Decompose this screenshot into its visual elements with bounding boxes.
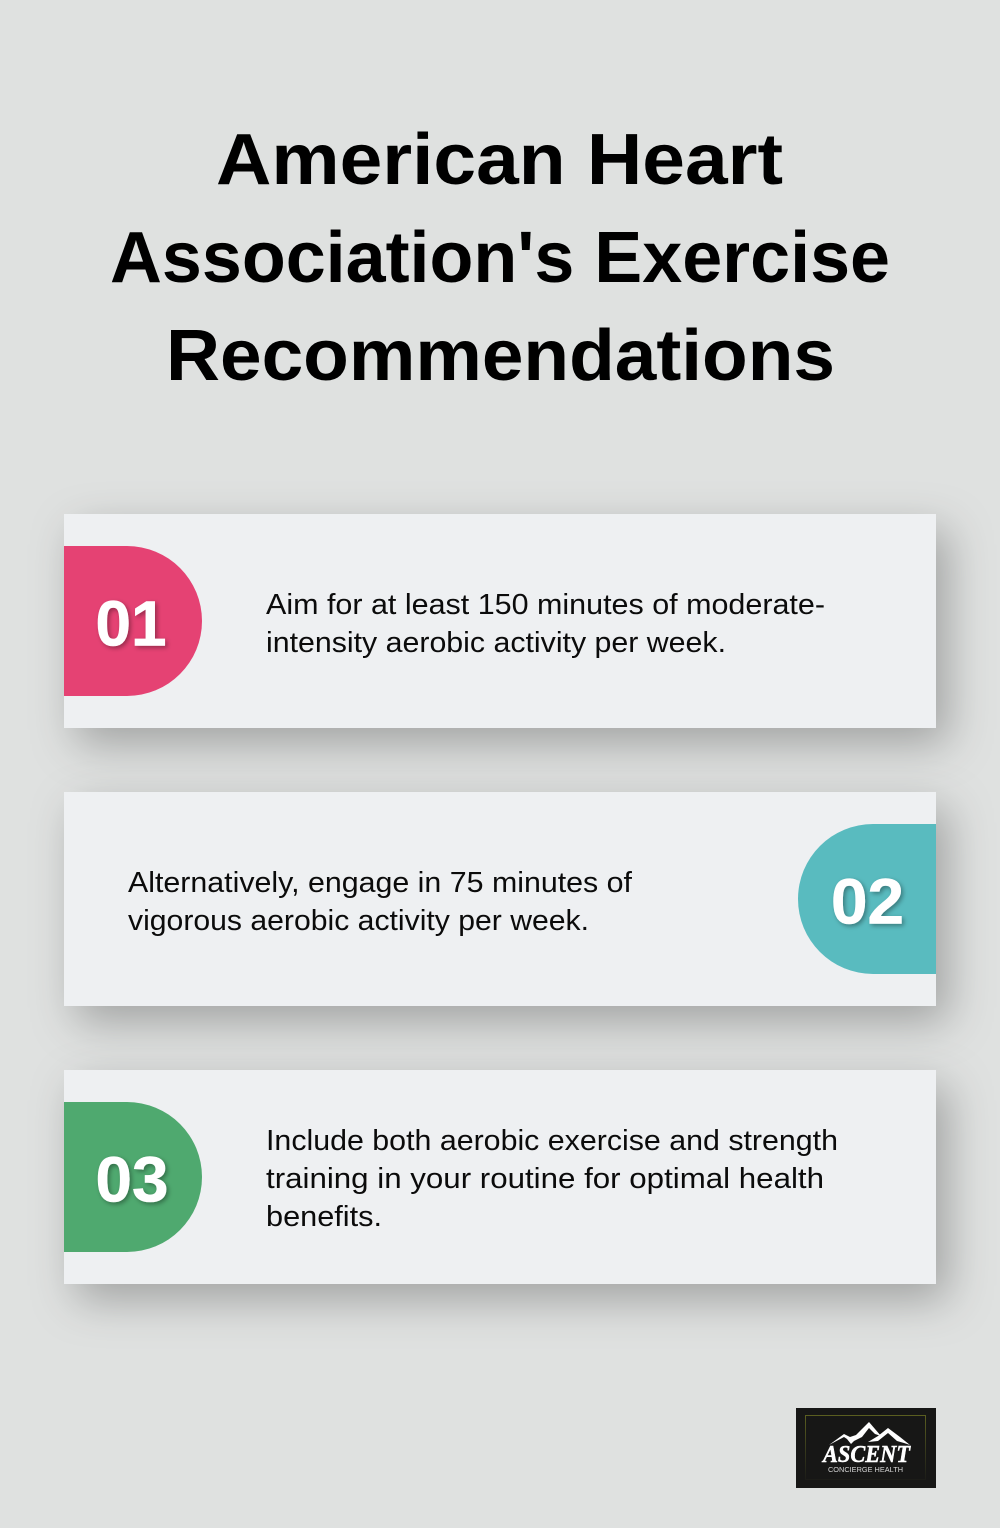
badge: 01 [64,546,202,696]
text: step 03: training in your routine for optimal health [266,1163,824,1195]
logo: Ascent Concierge Health: CONCIERGE HEALTH [828,1467,903,1474]
text: step 02: vigorous aerobic activity per week. [128,905,589,937]
text: step 02 [128,867,632,937]
logo: Ascent Concierge Health: ASCENT [821,1442,911,1468]
panel: step 02 [64,792,936,1006]
badge: 03: 03 [96,1144,168,1216]
text: step 01: Aim for at least 150 minutes of moderate- [266,589,825,621]
text: step 02: Alternatively, engage in 75 minutes of [128,867,632,899]
logo: Ascent Concierge Health [796,1408,936,1488]
title [110,120,890,396]
text: step 03: benefits. [266,1201,382,1233]
badge: 02: 02 [831,866,904,938]
title: Recommendations [166,316,835,396]
text: step 03 [266,1125,838,1233]
badge: 01: 01 [96,588,166,660]
panel: step 03 [64,1070,936,1284]
title: American Heart [216,120,783,200]
text: step 03: Include both aerobic exercise and strength [266,1125,838,1157]
text: step 01 [266,589,825,659]
panel: step 01 [64,514,936,728]
badge: 02 [798,824,936,974]
badge: 03 [64,1102,202,1252]
text: step 01: intensity aerobic activity per week. [266,627,726,659]
title: Association's Exercise [110,218,890,298]
